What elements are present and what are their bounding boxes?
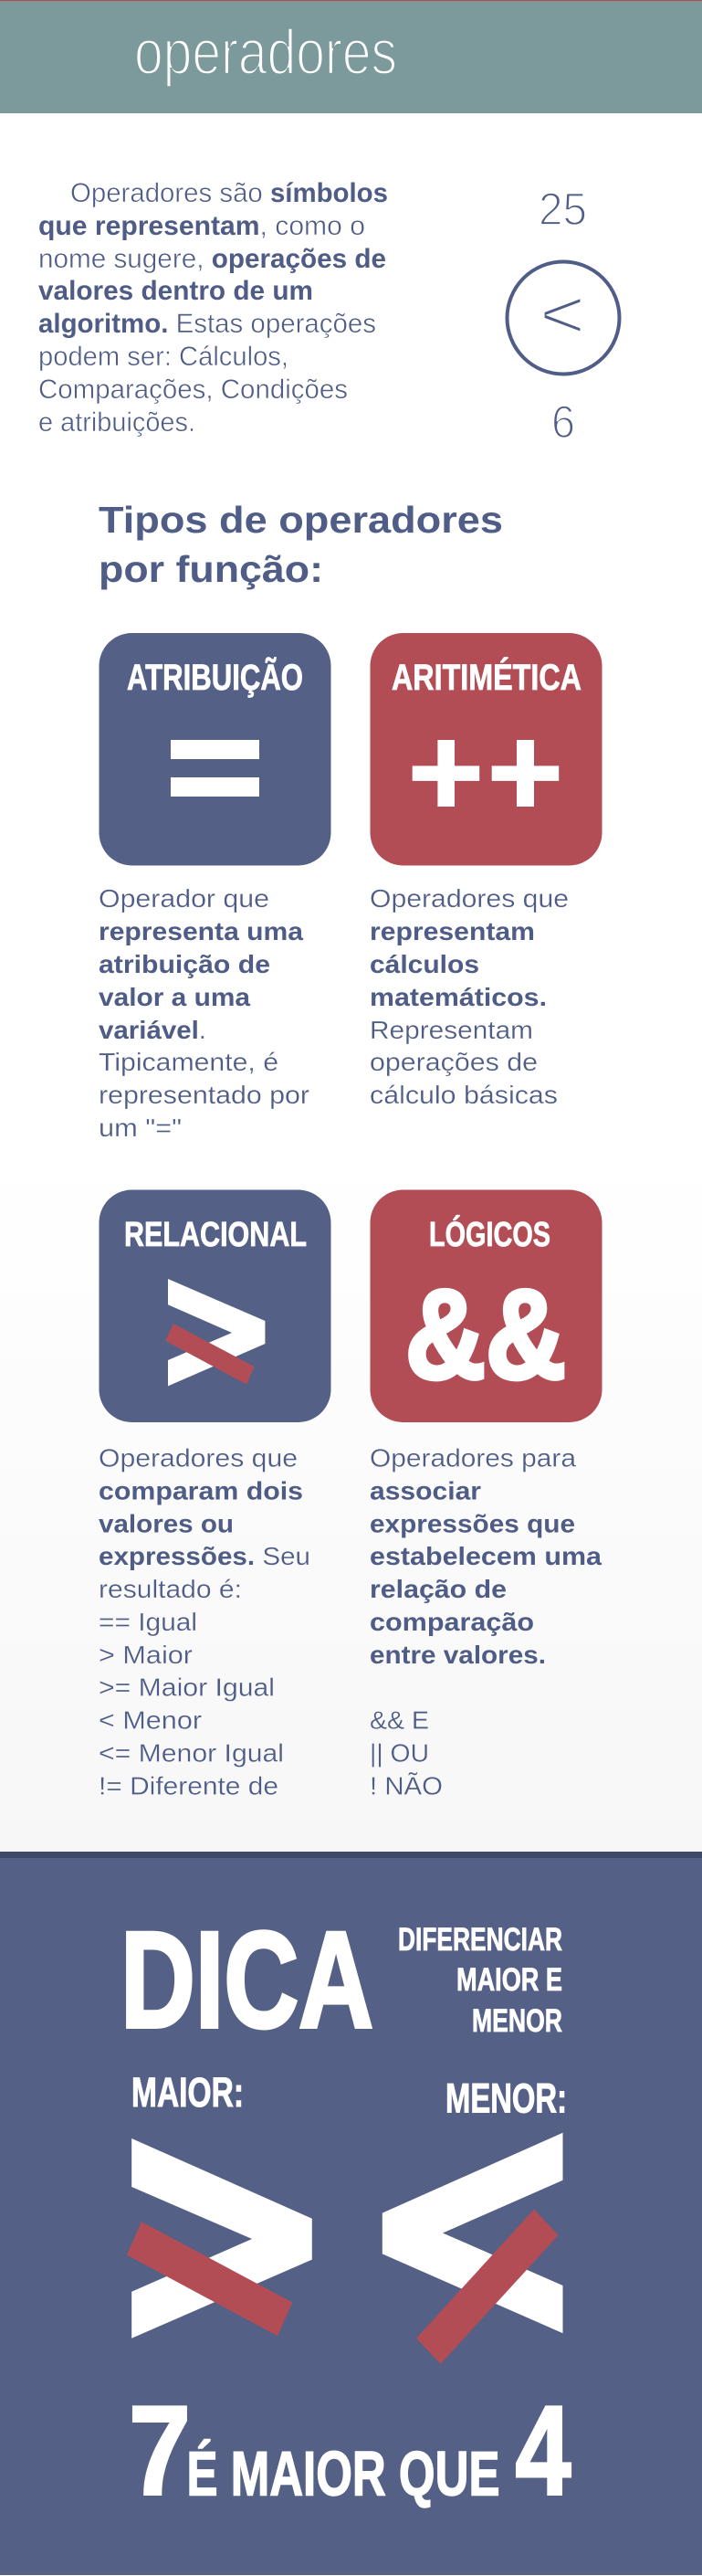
- text: relacional description: comparam dois: [99, 1476, 303, 1505]
- text: relacional description: >= Maior Igual: [99, 1673, 275, 1702]
- text: relacional description: valores ou: [99, 1509, 234, 1537]
- card: lógicos: LÓGICOS: [429, 1214, 550, 1254]
- circle with less-than sign: <: [540, 276, 585, 354]
- card: relacional: RELACIONAL: [124, 1216, 307, 1254]
- text: atribuição description: Tipicamente, é: [99, 1048, 278, 1076]
- text: atribuição description: representado por: [99, 1081, 309, 1109]
- number 6: 6: [551, 396, 575, 448]
- card: atribuição: [99, 633, 330, 866]
- dica subtitle: [398, 1922, 562, 2039]
- header band: [0, 0, 702, 113]
- intro text block: podem ser: Cálculos,: [38, 342, 288, 372]
- section heading: por função:: [99, 548, 323, 590]
- icon: double plus: [413, 740, 559, 807]
- intro text block: Operadores são símbolos: [70, 178, 388, 208]
- text: atribuição description: atribuição de: [99, 950, 270, 978]
- example sentence: [129, 2381, 571, 2521]
- card: aritmética: [371, 633, 602, 866]
- card: aritmética: ARITIMÉTICA: [392, 657, 582, 698]
- title: operadores: [134, 16, 397, 88]
- intro text block: e atribuições.: [38, 407, 195, 438]
- text: lógicos description: ! NÃO: [370, 1771, 443, 1800]
- text: atribuição description: variável.: [99, 1016, 206, 1044]
- text: relacional description: != Diferente de: [99, 1771, 278, 1800]
- text: relacional description: <= Menor Igual: [99, 1738, 284, 1767]
- intro text block: algoritmo. Estas operações: [38, 309, 376, 339]
- circle with less-than sign: [508, 261, 619, 375]
- intro text block: que representam, como o: [38, 211, 365, 241]
- text: atribuição description: Operador que: [99, 884, 269, 913]
- card: atribuição: ATRIBUIÇÃO: [127, 656, 303, 698]
- text: lógicos description: Operadores para: [370, 1444, 576, 1473]
- text: aritmética description: cálculo básicas: [370, 1081, 558, 1109]
- card: relacional: [99, 1189, 330, 1422]
- text: aritmética description: [370, 884, 569, 1109]
- section heading: [99, 499, 503, 590]
- card: lógicos: [371, 1189, 602, 1422]
- intro text block: valores dentro de um: [38, 276, 313, 306]
- label: menor: MENOR:: [445, 2075, 567, 2122]
- icon: big greater-than with red bar: [127, 2138, 312, 2338]
- panel: dica: [0, 1852, 702, 2575]
- text: lógicos description: comparação: [370, 1608, 534, 1636]
- text: atribuição description: um "=": [99, 1114, 182, 1142]
- panel: atribuição: [99, 633, 330, 1142]
- intro text block: [38, 178, 388, 438]
- text: lógicos description: entre valores.: [370, 1641, 546, 1669]
- text: aritmética description: cálculos: [370, 950, 479, 978]
- text: relacional description: [99, 1444, 310, 1800]
- number 25: 25: [539, 184, 587, 235]
- panel: lógicos: [370, 1189, 602, 1800]
- text: relacional description: < Menor: [99, 1706, 202, 1734]
- icon: greater-than with red bar: [165, 1279, 265, 1386]
- text: aritmética description: Operadores que: [370, 884, 569, 913]
- example sentence: 4: [515, 2381, 571, 2521]
- text: lógicos description: relação de: [370, 1575, 507, 1603]
- text: lógicos description: && E: [370, 1706, 429, 1734]
- example sentence: 7: [129, 2381, 191, 2521]
- text: relacional description: expressões. Seu: [99, 1542, 310, 1570]
- text: relacional description: resultado é:: [99, 1575, 242, 1603]
- dica heading: DICA: [120, 1903, 373, 2056]
- text: lógicos description: || OU: [370, 1738, 429, 1767]
- label: maior: MAIOR:: [131, 2069, 244, 2116]
- text: lógicos description: expressões que: [370, 1509, 575, 1537]
- icon: big less-than with red bar: [382, 2133, 562, 2364]
- text: atribuição description: [99, 884, 309, 1142]
- icon: equals sign: [171, 740, 259, 797]
- dica subtitle: DIFERENCIAR: [398, 1922, 562, 1958]
- example comparison graphic: [508, 184, 619, 448]
- dica subtitle: MENOR: [472, 2003, 562, 2039]
- panel: relacional: [99, 1189, 330, 1800]
- example sentence: É MAIOR QUE: [186, 2439, 500, 2508]
- text: atribuição description: representa uma: [99, 917, 303, 945]
- intro text block: nome sugere, operações de: [38, 244, 386, 274]
- text: atribuição description: valor a uma: [99, 983, 250, 1011]
- text: lógicos description: estabelecem uma: [370, 1542, 602, 1570]
- text: relacional description: Operadores que: [99, 1444, 298, 1473]
- text: relacional description: == Igual: [99, 1608, 197, 1636]
- text: aritmética description: representam: [370, 917, 535, 945]
- text: aritmética description: matemáticos.: [370, 983, 547, 1011]
- text: relacional description: > Maior: [99, 1641, 193, 1669]
- dica subtitle: MAIOR E: [456, 1962, 562, 1998]
- text: aritmética description: operações de: [370, 1048, 538, 1076]
- panel: aritmética: [370, 633, 602, 1109]
- icon: double ampersand: &&: [405, 1264, 566, 1405]
- text: lógicos description: [370, 1444, 602, 1800]
- text: lógicos description: associar: [370, 1476, 481, 1505]
- intro text block: Comparações, Condições: [38, 375, 348, 405]
- section heading: Tipos de operadores: [99, 499, 503, 541]
- text: aritmética description: Representam: [370, 1016, 533, 1044]
